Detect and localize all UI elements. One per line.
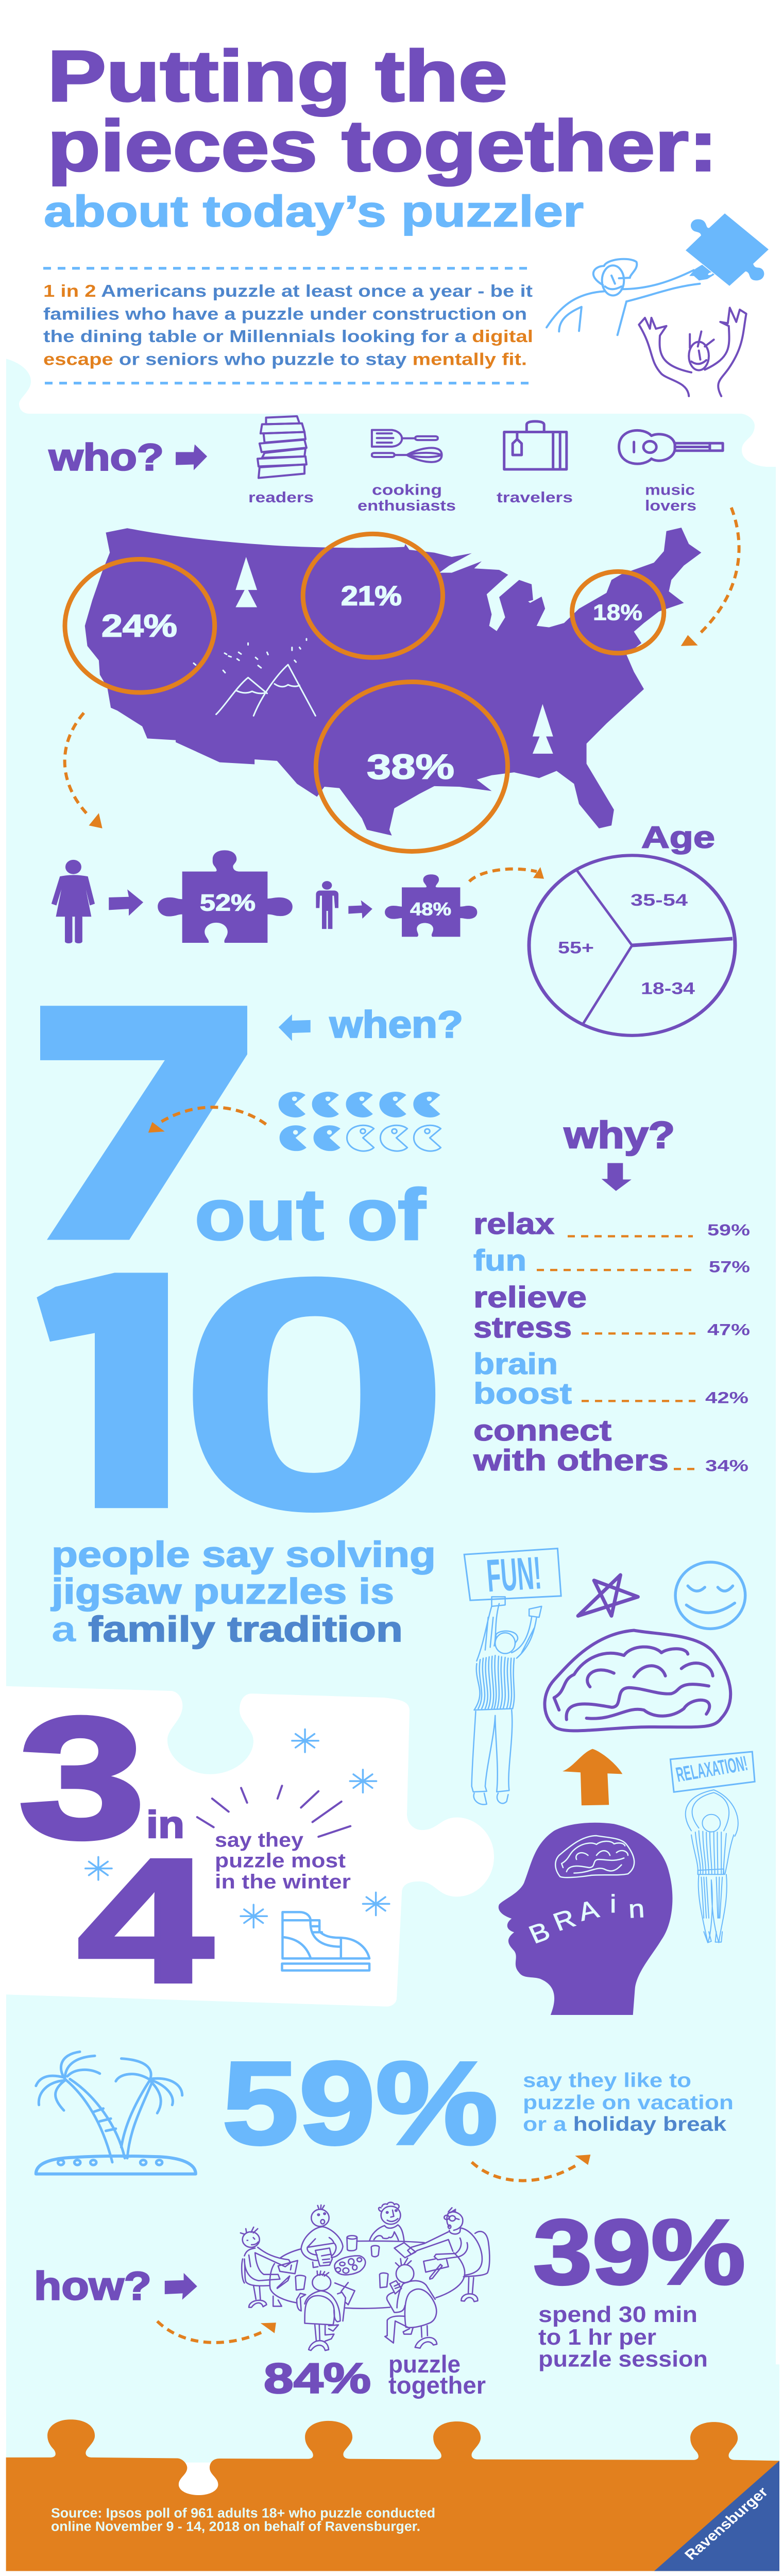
stat: 84% puzzle together: puzzle [388,2350,461,2378]
big number: 59%: 59% [222,2038,498,2169]
icon: ice skate [282,1912,369,1971]
region percentages: 38% [367,747,454,787]
palette [334,2256,365,2275]
icon labels: music [645,481,695,498]
icon: cooking utensils [372,430,442,462]
arrow: when [279,1014,311,1041]
text: vacation [523,2070,734,2135]
person front left [297,2271,355,2350]
arrow: dashed to gender [65,713,103,828]
pie chart: age: 35-54 [631,891,688,910]
icon: woman [52,860,95,943]
text: say they puzzle most in the winter: puzzle most [215,1849,346,1872]
arrow: man to piece [348,900,372,919]
heading: how: how? [34,2264,151,2308]
icon labels: enthusiasts [358,497,456,514]
icon: man [316,881,338,929]
region percentages: 21% [341,581,402,611]
reason: connect with others: with others [473,1444,669,1477]
doodle: sunburst lines [197,1786,350,1837]
text: vacation: say they like to [523,2070,691,2091]
stat: 84% puzzle together [264,2350,486,2402]
heading: who: who? [48,436,164,478]
puzzle piece: 48%: 48% [410,899,451,919]
reason: brain boost: 42% [705,1389,748,1407]
illustration: person holding relaxation sign [686,1790,738,1943]
person right [394,2208,489,2301]
icon labels: readers [248,489,314,506]
text: family tradition: a family tradition [52,1609,403,1649]
reason: fun: 57% [709,1258,750,1276]
puzzle piece: 48% [385,874,477,937]
icon labels: travelers [497,489,573,506]
reason: relax: relax [473,1208,555,1241]
arrow: dashed vacation [472,2155,590,2181]
big number: 3 in 4: 3 [19,1682,145,1874]
table edge [270,2241,465,2309]
title [47,36,718,186]
reason: brain boost: boost [473,1377,572,1411]
big number: 7: 7 [5,941,252,1303]
region percentages [101,581,642,787]
illustration: head silhouette with brain [499,1823,672,2015]
illustration: person holding fun sign [472,1597,541,1805]
icon: blue puzzle piece [686,213,769,286]
person top-middle [369,2202,404,2241]
person left [241,2227,298,2308]
text: family tradition: people say solving [52,1534,436,1574]
stat: 84% puzzle together: together [388,2371,486,2399]
text: say they puzzle most in the winter: say they [215,1828,304,1851]
illustration: group puzzling at table [241,2202,489,2350]
reason: brain boost: brain [473,1348,558,1381]
intro text block: the dining table or Millennials looking for a digital [43,327,533,346]
arrow: who [176,444,207,470]
heading: when: when? [329,1003,463,1045]
icon: suitcase [504,421,567,469]
map of the United States [65,528,701,851]
reason: connect with others: 34% [705,1457,748,1475]
stat: 39%: to 1 hr per [538,2324,656,2349]
text: say they puzzle most in the winter: in the winter [215,1870,351,1893]
reason: relieve stress: 47% [707,1321,750,1339]
text: vacation: puzzle on vacation [523,2091,734,2113]
stat: 39%: puzzle session [538,2346,708,2371]
person front right [385,2258,437,2348]
source note [51,2505,435,2534]
big number: 3 in 4: 4 [78,1822,214,2019]
text: out of: out of [195,1174,426,1255]
arrow: dashed to age [469,867,544,882]
person top-left [301,2205,343,2267]
region percentages: 24% [101,608,177,643]
pie chart: age: 18-34 [641,979,695,998]
icon labels: lovers [645,497,696,514]
arrow: orange up [563,1749,622,1805]
title: Putting the [47,36,507,116]
doodle: brain [544,1630,730,1731]
icon: guitar [619,430,723,464]
pictogram: 7 of 10 people [279,1092,441,1151]
white puzzle piece panel [0,1686,494,2007]
big number: 10: 1 [15,1207,227,1579]
arrow: woman to piece [109,889,143,916]
reason: brain boost [473,1348,748,1411]
reason: fun [473,1244,750,1277]
text: vacation: or a holiday break [523,2113,726,2135]
pie chart: age: 55+ [558,939,594,957]
icons: snowflakes [86,1730,389,1927]
stat: 84% puzzle together: 84% [264,2354,371,2402]
reason: relieve stress [473,1281,750,1344]
illustration: person reaching for puzzle piece [547,259,700,335]
icon: hand gripping the piece [689,265,714,280]
arrow: dashed to map [681,507,739,646]
title: pieces together: [47,106,718,186]
region circles [65,534,664,851]
list: reasons for puzzling [473,1208,750,1477]
subtitle: about today’s puzzler [44,187,584,236]
big number: 10 [37,1273,436,1513]
pie chart: age [529,855,735,1036]
intro text block: families who have a puzzle under construction on [43,304,527,324]
text: family tradition: jigsaw puzzles is [50,1571,394,1611]
stat: 39% [533,2200,745,2371]
reason: fun: fun [473,1244,526,1277]
sign: fun [464,1547,561,1602]
big number: 3 in 4: in [146,1803,184,1846]
region percentages: 18% [593,599,642,625]
reason: relieve stress: relieve [473,1281,587,1314]
logo corner: Ravensburger: Ravensburger [682,2484,772,2563]
heading: why: why? [564,1114,675,1156]
reason: relieve stress: stress [473,1311,572,1344]
map trees [235,557,553,754]
map mountains [194,639,315,716]
illustration: palm island [36,2052,196,2174]
arrow: how [165,2273,197,2300]
cups front [296,2273,388,2290]
heading: age: Age [641,820,715,854]
source note: online November 9 - 14, 2018 on behalf of Ravensburger. [51,2518,420,2534]
reason: connect with others: connect [473,1414,611,1447]
footer: orange puzzle edge [6,2419,779,2571]
text: say they puzzle most in the winter [215,1828,351,1893]
arrow: why [602,1163,632,1191]
text: family tradition [50,1534,436,1649]
reason: relax: 59% [707,1221,750,1239]
icon labels: cooking [372,481,442,498]
intro text block: 1 in 2 Americans puzzle at least once a year - be it [43,281,533,300]
source note: Source: Ipsos poll of 961 adults 18+ who puzzle conducted [51,2505,435,2520]
reason: relax [473,1208,750,1241]
doodle: smiley face [675,1562,745,1629]
puzzle piece: 52% [158,850,293,943]
sign: relaxation [670,1752,755,1792]
big number: 10: 0 [177,1211,452,1577]
arrow: dashed to table [157,2321,276,2343]
reason: connect with others [473,1414,748,1477]
logo corner: Ravensburger [654,2461,779,2571]
icon: books [258,416,307,478]
icon labels [248,481,696,514]
cup [371,2246,379,2257]
doodle: star [578,1575,638,1616]
arrow: dashed to 7 [148,1107,266,1132]
cup [347,2235,357,2251]
intro text block: escape or seniors who puzzle to stay mentally fit. [43,350,527,369]
text: brain on head: BRAin [524,1890,645,1950]
stat: 39%: 39% [533,2200,745,2303]
intro text block [43,268,534,383]
illustration: cheering person [639,308,746,396]
big number: 3 in 4 [19,1682,214,2019]
stat: 39%: spend 30 min [538,2301,697,2327]
puzzle piece: 52%: 52% [200,890,256,916]
sign: fun: FUN! [485,1547,543,1602]
